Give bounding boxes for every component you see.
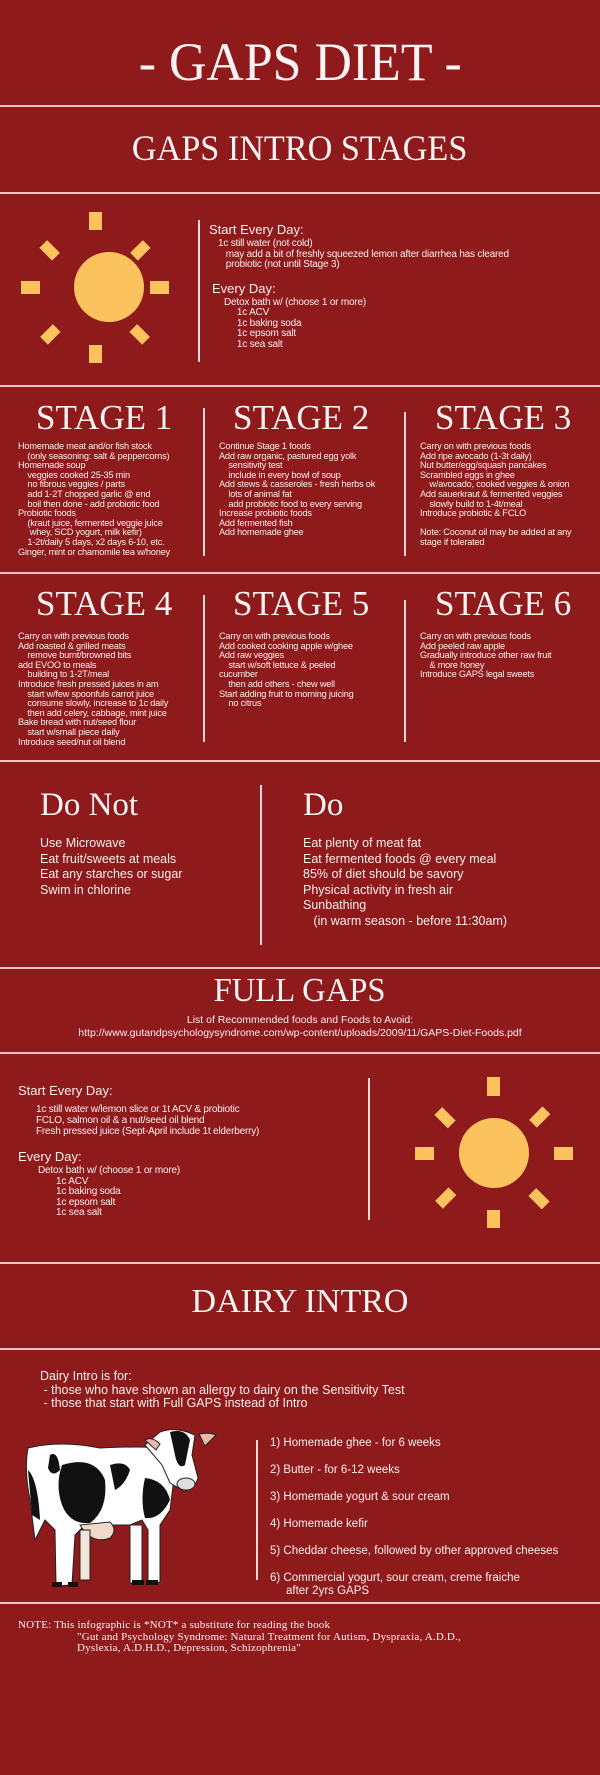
panel: stage 4 <box>18 584 172 747</box>
panel: do: Do <box>303 787 343 823</box>
list: dairy introduction order: 4) Homemade kefir <box>270 1518 368 1530</box>
panel: do not: Use Microwave Eat fruit/sweets at meals Eat any starches or sugar Swim in chlorine <box>40 836 182 896</box>
panel: stage 4: STAGE 4 <box>36 584 172 623</box>
panel: stage 5 <box>219 584 369 708</box>
panel: do <box>303 787 507 928</box>
note: NOTE: This infographic is *NOT* a substitute for reading the book "Gut and Psychology Syndrome: Natural Treatment for Autism, Dyspraxia, A.D.D., Dyslexia, A.D.H.D., Depression, Schizophrenia" <box>18 1619 461 1654</box>
panel: do: Eat plenty of meat fat Eat fermented foods @ every meal 85% of diet should be savory Physical activity in fresh air Sunbathing (in warm season - before 11:30am) <box>303 836 507 928</box>
text: intro daily routine <box>209 222 509 350</box>
text: dairy intro is for: Dairy Intro is for: - those who have shown an allergy to dairy on the Sensitivity Test - those that start with Full GAPS instead of Intro <box>40 1369 405 1410</box>
title: - GAPS DIET - <box>138 32 462 92</box>
text: recommended foods link: List of Recommended foods and Foods to Avoid: <box>187 1014 413 1026</box>
text: full gaps daily routine: Every Day: <box>18 1149 82 1164</box>
text: full gaps daily routine: Detox bath w/ (choose 1 or more) 1c ACV 1c baking soda 1c epsom salt 1c sea salt <box>38 1165 180 1218</box>
panel: stage 3: STAGE 3 <box>435 398 571 437</box>
text: full gaps daily routine: Start Every Day: <box>18 1083 113 1098</box>
list: dairy introduction order: 5) Cheddar cheese, followed by other approved cheeses <box>270 1545 558 1557</box>
panel: stage 2: STAGE 2 <box>233 398 369 437</box>
panel: stage 5: Carry on with previous foods Add cooked cooking apple w/ghee Add raw veggies start w/soft lettuce & peeled cucumber then add others - chew well Start adding fruit to morning juicing no citrus <box>219 631 354 708</box>
panel: stage 6 <box>420 584 571 679</box>
list: dairy introduction order: 3) Homemade yogurt & sour cream <box>270 1491 450 1503</box>
text: intro daily routine: Detox bath w/ (choose 1 or more) 1c ACV 1c baking soda 1c epsom salt 1c sea salt <box>224 296 366 350</box>
panel: do not: Do Not <box>40 787 138 823</box>
text: recommended foods link <box>78 1014 522 1039</box>
icon: cow <box>26 1429 217 1587</box>
panel: stage 3: Carry on with previous foods Add ripe avocado (1-3t daily) Nut butter/egg/squash pancakes Scrambled eggs in ghee w/avocado, cooked veggies & onion Add sauerkraut & fermented veggies slowly build to 1-4t/meal Introduce probiotic & FCLO Note: Coconut oil may be added at any stage if tolerated <box>420 441 571 547</box>
panel: stage 5: STAGE 5 <box>233 584 369 623</box>
text: full gaps daily routine <box>18 1083 259 1218</box>
panel: stage 1: STAGE 1 <box>36 398 172 437</box>
panel: stage 2 <box>219 398 376 537</box>
list: dairy introduction order: 6) Commercial yogurt, sour cream, creme fraiche after 2yrs GAPS <box>270 1572 520 1597</box>
heading: GAPS intro stages: GAPS INTRO STAGES <box>132 128 468 168</box>
panel: stage 2: Continue Stage 1 foods Add raw organic, pastured egg yolk sensitivity test include in every bowl of soup Add stews & casseroles - fresh herbs ok lots of animal fat add probiotic food to every serving Increase probiotic foods Add fermented fish Add homemade ghee <box>219 441 375 537</box>
panel: stage 6: STAGE 6 <box>435 584 571 623</box>
text: recommended foods link: http://www.gutandpsychologysyndrome.com/wp-content/uploads/2009/11/GAPS-Diet-Foods.pdf <box>78 1027 522 1039</box>
icon: sun (intro) <box>21 212 169 363</box>
panel: stage 6: Carry on with previous foods Add peeled raw apple Gradually introduce other raw fruit & more honey Introduce GAPS legal sweets <box>420 631 551 679</box>
list: dairy introduction order: 1) Homemade ghee - for 6 weeks <box>270 1437 441 1449</box>
list: dairy introduction order: 2) Butter - for 6-12 weeks <box>270 1464 400 1476</box>
text: intro daily routine: Start Every Day: <box>209 222 304 237</box>
text: intro daily routine: Every Day: <box>212 280 276 296</box>
list: dairy introduction order <box>270 1437 558 1597</box>
panel: stage 1: Homemade meat and/or fish stock (only seasoning: salt & peppercorns) Homemade soup veggies cooked 25-35 min no fibrous veggies / parts add 1-2T chopped garlic @ end boil then done - add probiotic food Probiotic foods (kraut juice, fermented veggie juice whey, SCD yogurt, milk kefir) 1-2t/daily 5 days, x2 days 6-10, etc. Ginger, mint or chamomile tea w/honey <box>18 441 170 557</box>
heading: dairy intro: DAIRY INTRO <box>192 1283 408 1320</box>
panel: stage 4: Carry on with previous foods Add roasted & grilled meats remove burnt/browned bits add EVOO to meals building to 1-2T/meal Introduce fresh pressed juices in am start w/few spoonfuls carrot juice consume slowly, increase to 1c daily then add celery, cabbage, mint juice Bake bread with nut/seed flour start w/small piece daily Introduce seed/nut oil blend <box>18 631 168 747</box>
panel: do not <box>40 787 182 896</box>
icon: sun (full gaps) <box>415 1077 573 1228</box>
heading: full gaps: FULL GAPS <box>214 972 386 1009</box>
text: intro daily routine: 1c still water (not cold) may add a bit of freshly squeezed lemon after diarrhea has cleared probiotic (not until Stage 3) <box>218 238 509 270</box>
text: full gaps daily routine: 1c still water w/lemon slice or 1t ACV & probiotic FCLO, salmon oil & a nut/seed oil blend Fresh pressed juice (Sept-April include 1t elderberry) <box>36 1104 259 1137</box>
